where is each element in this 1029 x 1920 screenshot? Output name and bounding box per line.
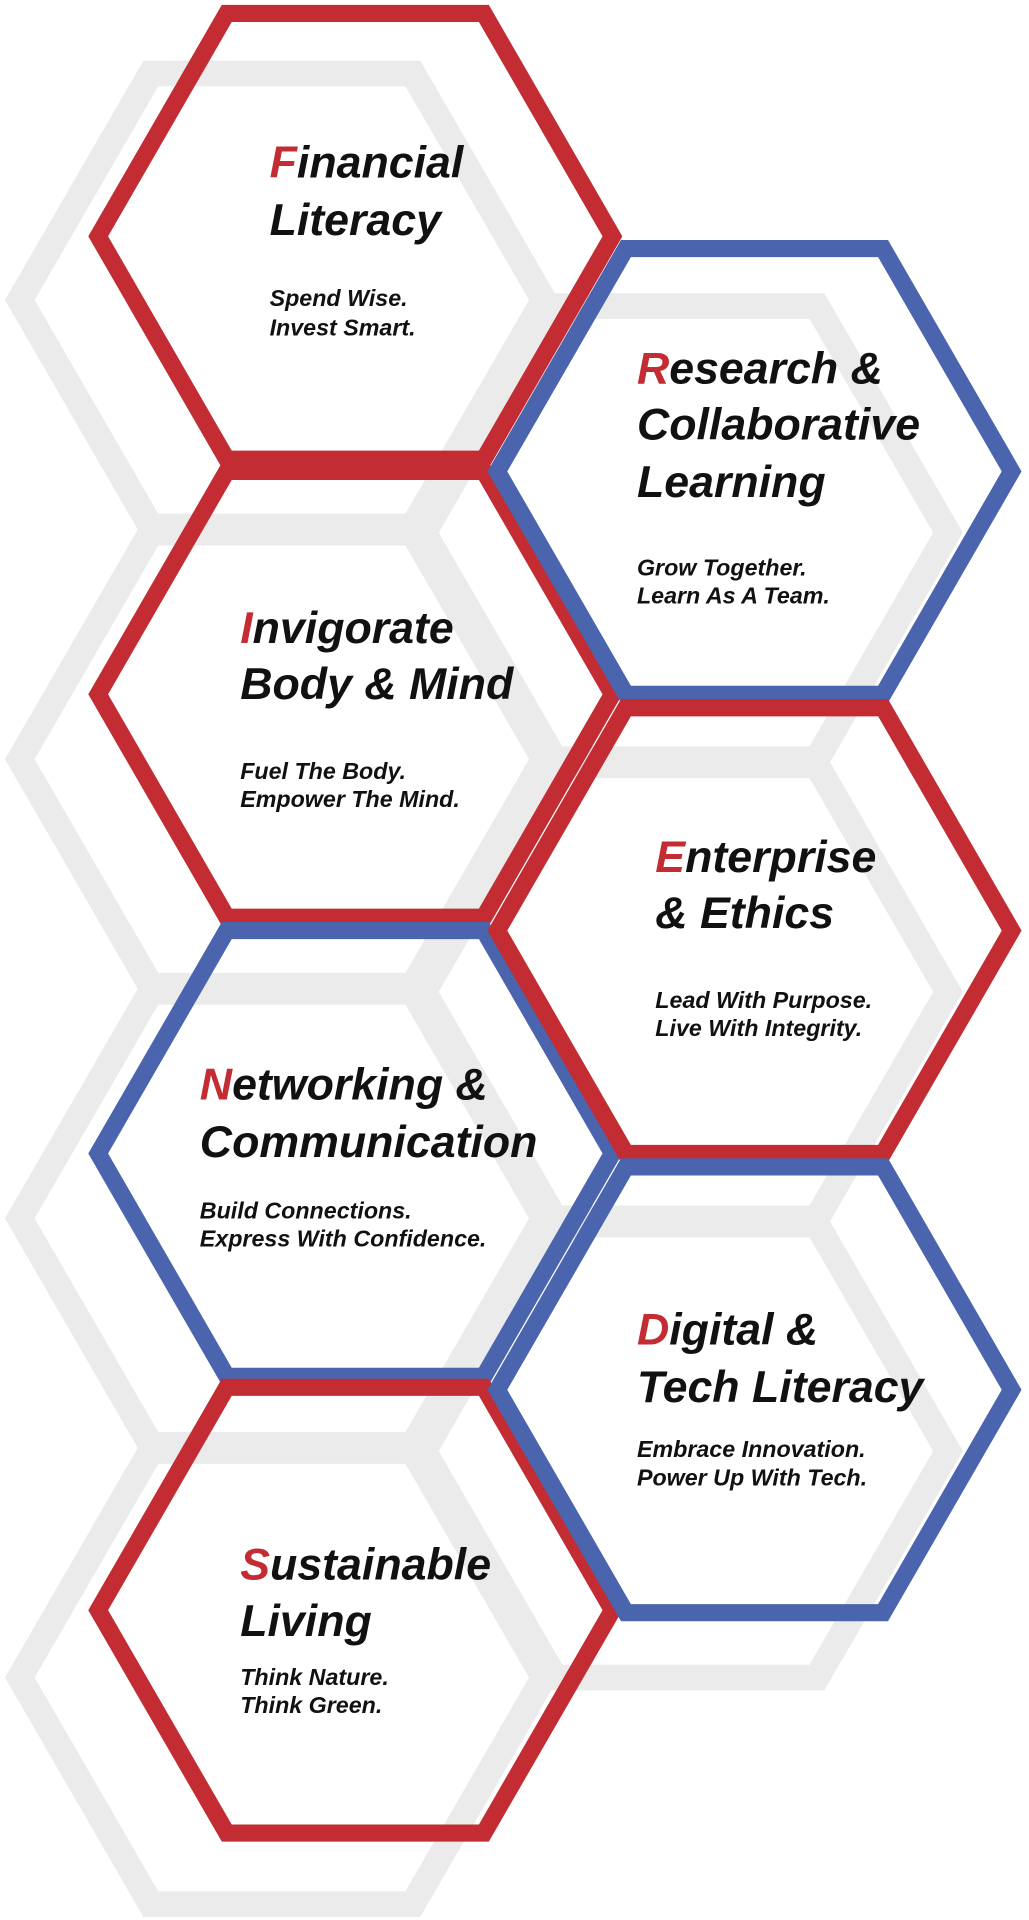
- hexagon: Financial Literacy: Literacy: [270, 196, 443, 245]
- hexagon: Financial Literacy: [98, 13, 612, 459]
- hexagon: Sustainable Living: Think Nature.: [240, 1664, 389, 1690]
- hexagon: Research & Collaborative Learning: [497, 249, 1012, 694]
- hexagon: Networking & Communication: Networking &: [200, 1061, 488, 1110]
- hexagon: Financial Literacy: Invest Smart.: [270, 315, 416, 341]
- hexagon: Research & Collaborative Learning: Grow Together.: [637, 555, 807, 581]
- hexagon: Invigorate Body & Mind: Body & Mind: [240, 660, 515, 709]
- hexagon: Invigorate Body & Mind: Invigorate: [240, 604, 454, 653]
- hexagon: Digital & Tech Literacy: Tech Literacy: [637, 1363, 926, 1412]
- hexagon: Financial Literacy: Spend Wise.: [270, 285, 408, 311]
- hexagon: Enterprise & Ethics: Lead With Purpose.: [655, 987, 872, 1013]
- hexagon: Enterprise & Ethics: Live With Integrity.: [655, 1015, 862, 1041]
- hexagon: Networking & Communication: Communication: [200, 1118, 537, 1167]
- hexagon: Invigorate Body & Mind: Empower The Mind.: [240, 786, 460, 812]
- hexagon: Digital & Tech Literacy: Power Up With Tech.: [637, 1464, 867, 1490]
- hexagon: Digital & Tech Literacy: [497, 1167, 1012, 1613]
- hexagon: Research & Collaborative Learning: Research &: [637, 344, 883, 393]
- hexagon: Sustainable Living: [98, 1387, 612, 1833]
- hexagon: Invigorate Body & Mind: [98, 471, 612, 917]
- hexagon: Networking & Communication: [98, 931, 612, 1376]
- hexagon: Digital & Tech Literacy: Embrace Innovation.: [637, 1436, 866, 1462]
- hexagon: Research & Collaborative Learning: Learn As A Team.: [637, 583, 830, 609]
- hexagon: Networking & Communication: Express With Confidence.: [200, 1226, 486, 1252]
- hexagon: Research & Collaborative Learning: Collaborative: [637, 401, 920, 450]
- hexagon: Research & Collaborative Learning: Learning: [637, 458, 826, 507]
- hexagon: Sustainable Living: Think Green.: [240, 1692, 382, 1718]
- hexagon: Invigorate Body & Mind: Fuel The Body.: [240, 758, 406, 784]
- hexagon: Financial Literacy: Financial: [270, 139, 465, 188]
- hexagon: Networking & Communication: Build Connections.: [200, 1197, 412, 1223]
- hexagon: Enterprise & Ethics: Enterprise: [655, 833, 876, 882]
- hexagon: Sustainable Living: Living: [240, 1597, 372, 1646]
- hexagon: Sustainable Living: Sustainable: [240, 1541, 491, 1590]
- hexagon: Enterprise & Ethics: & Ethics: [655, 889, 834, 938]
- hexagon: Enterprise & Ethics: [497, 708, 1012, 1153]
- hexagon: Digital & Tech Literacy: Digital &: [637, 1305, 818, 1354]
